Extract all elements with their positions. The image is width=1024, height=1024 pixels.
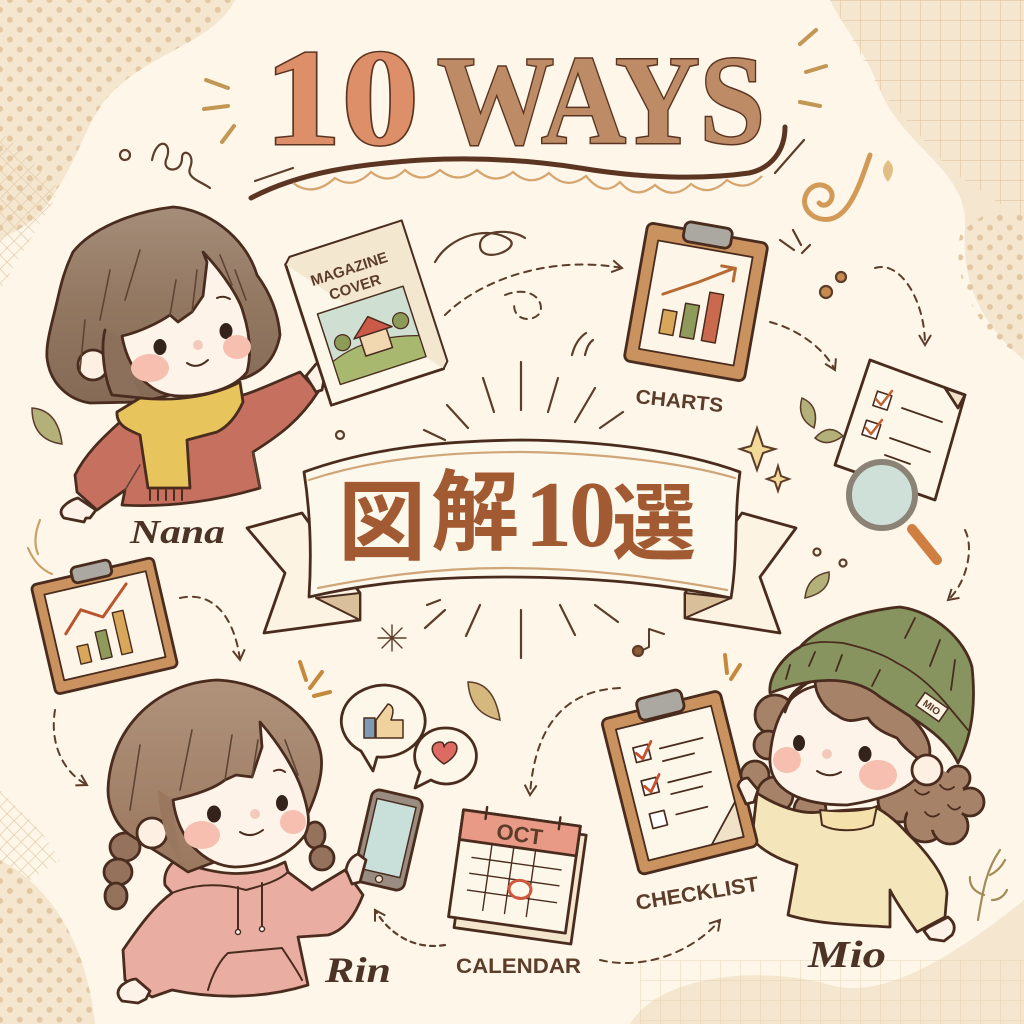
Nana hair back <box>47 207 280 403</box>
banner heading: 10 <box>525 463 613 567</box>
Mio tag <box>916 692 948 722</box>
icon: document with magnifier <box>835 360 965 560</box>
decoration: bursts around banner <box>336 362 623 658</box>
icon: phone <box>352 788 424 892</box>
banner heading: 解 <box>431 466 519 563</box>
Nana face <box>122 252 250 396</box>
title: 10 WAYS <box>251 21 804 198</box>
Mio sweater <box>752 793 947 932</box>
label: CHECKLIST: CHECKLIST <box>634 873 760 915</box>
Rin hand <box>346 854 366 884</box>
icon: chart clipboard left <box>29 549 178 695</box>
Mio fringe curls <box>785 679 930 765</box>
banner: 図解10選 <box>247 440 796 633</box>
title: 10 WAYS: WAYS <box>437 31 765 171</box>
character: Rin <box>104 680 363 1003</box>
Nana sweater <box>75 372 318 510</box>
character: Nana <box>47 207 326 522</box>
Mio curly hair <box>741 695 984 844</box>
Mio hand <box>738 778 758 804</box>
banner heading: 図 <box>338 476 426 573</box>
icon: magazine cover <box>284 220 449 405</box>
label: Mio: Mio <box>807 934 886 976</box>
icon: magazine cover: COVER <box>327 271 383 304</box>
icon: magazine cover: MAGAZINE <box>309 249 390 290</box>
title: 10 WAYS: 10 <box>264 21 419 174</box>
banner heading: 選 <box>612 479 696 572</box>
decoration: title sparks <box>120 30 893 220</box>
icon: leaves <box>32 398 843 720</box>
Mio face <box>770 685 925 805</box>
Rin braids <box>104 822 334 909</box>
label: Nana: Nana <box>129 514 225 551</box>
Mio tag: MIO <box>920 698 942 718</box>
decoration: swirl and notes <box>28 230 1007 920</box>
icon: calendar: OCT <box>495 819 545 850</box>
banner body <box>304 440 740 598</box>
Nana scarf <box>117 382 243 488</box>
icon: sparkles <box>740 428 789 491</box>
Mio beanie <box>770 607 974 763</box>
Rin face <box>173 722 308 867</box>
icon: charts clipboard <box>624 215 770 382</box>
label: Rin: Rin <box>324 950 391 990</box>
Rin hoodie <box>123 860 363 997</box>
arrows: dashed flow <box>54 265 969 963</box>
icon: checklist clipboard <box>598 680 758 875</box>
Rin hair <box>108 680 322 872</box>
label: CALENDAR: CALENDAR <box>456 955 581 978</box>
icon: speech bubbles <box>341 685 476 788</box>
banner tails <box>247 513 360 633</box>
character: Mio <box>741 607 984 941</box>
icon: calendar <box>447 804 588 944</box>
label: CHARTS: CHARTS <box>634 386 724 417</box>
